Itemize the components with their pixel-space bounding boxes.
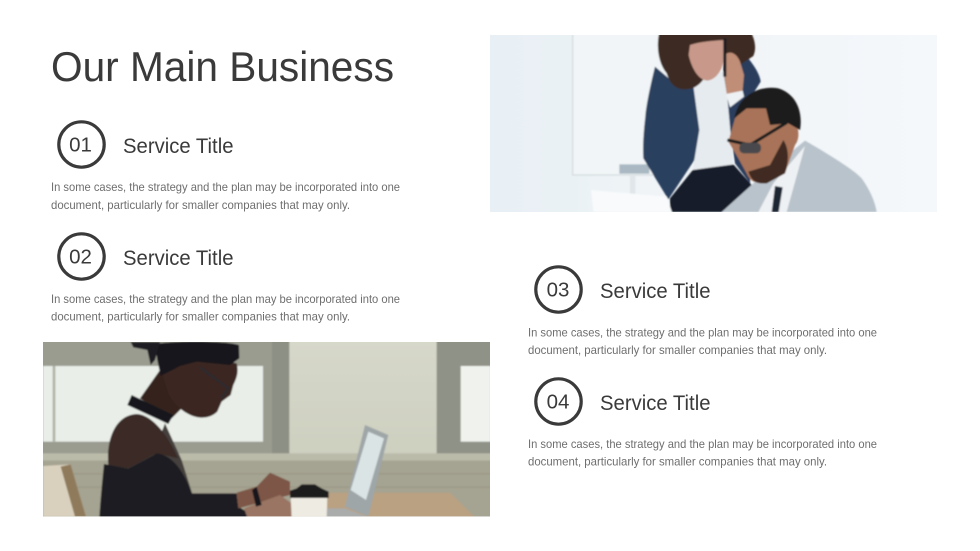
man head xyxy=(728,105,798,183)
body 03: In some cases, the strategy and the plan may be incorporated into one xyxy=(528,326,877,340)
body 03 xyxy=(528,326,877,357)
dreadlocks xyxy=(131,342,160,365)
badge 02 xyxy=(59,234,104,279)
body 03: document, particularly for smaller companies that may only. xyxy=(528,344,827,357)
heading 03: Service Title xyxy=(600,279,710,303)
laptop xyxy=(591,190,672,212)
laptop xyxy=(345,425,388,517)
cuff xyxy=(726,91,744,107)
face xyxy=(162,358,238,418)
chair xyxy=(43,464,76,516)
badge 03: 03 xyxy=(547,278,569,302)
bare shoulder xyxy=(108,414,178,468)
badge 04 xyxy=(536,379,581,424)
body 02 xyxy=(51,293,400,324)
man shirt and tie xyxy=(758,146,805,212)
badge 01 xyxy=(59,122,104,167)
shirt xyxy=(692,72,733,170)
sheer chest panel xyxy=(161,423,192,494)
body 01 xyxy=(51,181,400,212)
glasses xyxy=(200,367,228,398)
hand on phone xyxy=(724,53,744,103)
badge 03 xyxy=(536,267,581,312)
neck xyxy=(140,370,187,418)
face xyxy=(689,40,724,81)
body 04 xyxy=(528,438,877,468)
trousers xyxy=(670,164,752,212)
arm and hands xyxy=(237,473,290,508)
body 02: document, particularly for smaller companies that may only. xyxy=(51,310,350,324)
badge 04: 04 xyxy=(547,390,569,414)
service 02 xyxy=(51,234,400,324)
service 03 xyxy=(528,267,877,357)
body 04: In some cases, the strategy and the plan may be incorporated into one xyxy=(528,438,877,451)
woman jacket xyxy=(643,67,703,199)
collar xyxy=(127,395,173,424)
sleeve xyxy=(99,453,247,517)
service 01 xyxy=(51,122,400,212)
hair xyxy=(155,342,239,376)
body 02: In some cases, the strategy and the plan may be incorporated into one xyxy=(51,293,400,306)
man suit xyxy=(722,141,877,212)
heading 01: Service Title xyxy=(123,134,234,158)
body 01: In some cases, the strategy and the plan may be incorporated into one xyxy=(51,181,400,194)
badge 01: 01 xyxy=(69,134,92,156)
hair xyxy=(658,32,755,89)
body 04: document, particularly for smaller companies that may only. xyxy=(528,456,827,468)
photo: woman working at a laptop by a window xyxy=(40,340,493,520)
body 01: document, particularly for smaller companies that may only. xyxy=(51,199,350,212)
title: Our Main Business xyxy=(51,43,394,90)
heading 02: Service Title xyxy=(123,246,234,270)
badge 02: 02 xyxy=(69,246,92,268)
heading 04: Service Title xyxy=(600,391,710,415)
cup xyxy=(291,497,327,517)
table xyxy=(327,493,475,517)
photo: two colleagues at a laptop xyxy=(490,30,937,212)
service 04 xyxy=(528,379,877,468)
